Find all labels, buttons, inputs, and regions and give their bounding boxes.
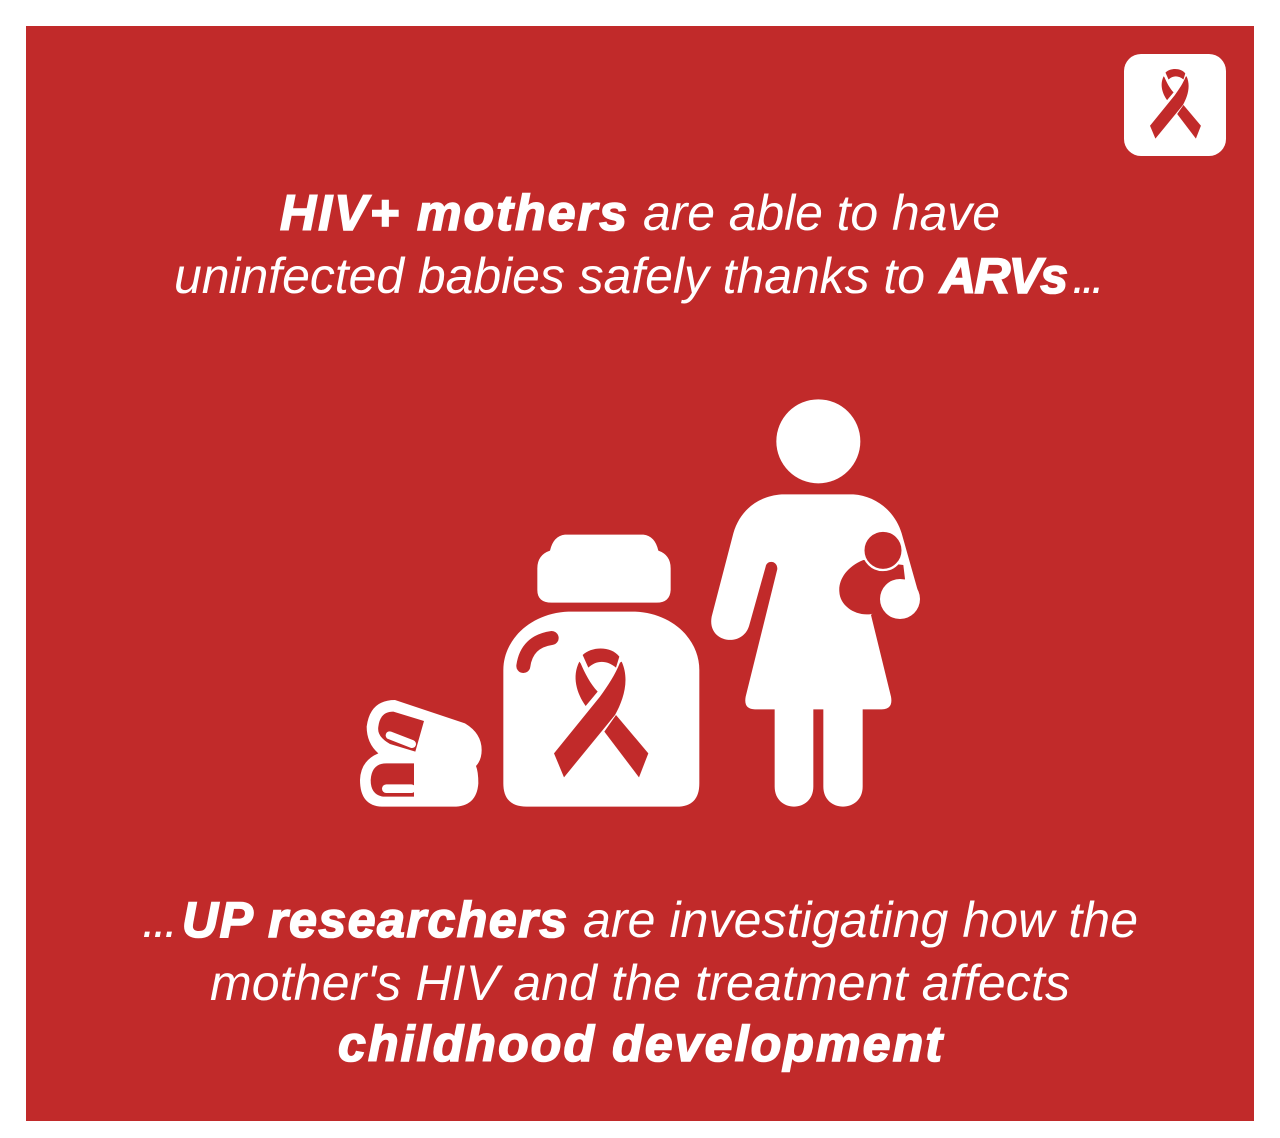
icon: mother holding baby — [711, 399, 920, 807]
baby body — [839, 560, 905, 614]
heading: top statement: uninfected babies safely thanks to — [174, 248, 925, 304]
heading: top statement: ARVs — [938, 248, 1068, 304]
heading: top statement — [174, 185, 1105, 304]
mother head — [776, 399, 860, 483]
icon: medicine jar with ribbon — [503, 535, 699, 807]
icon: capsules — [360, 700, 482, 807]
text: bottom statement: mother's HIV and the treatment affects — [210, 955, 1070, 1011]
jar lid — [537, 535, 671, 603]
text: bottom statement — [142, 892, 1138, 1072]
text: bottom statement: childhood development — [338, 1016, 944, 1072]
icon: ribbon logo badge — [1124, 54, 1226, 156]
heading: top statement: HIV+ mothers — [280, 185, 627, 241]
mother hand — [880, 579, 920, 619]
text: bottom statement: ... — [142, 892, 178, 948]
mother body — [711, 494, 919, 807]
text: bottom statement: are investigating how the — [583, 892, 1138, 948]
baby head — [863, 531, 903, 570]
jar highlight — [523, 638, 552, 666]
jar body — [503, 612, 699, 807]
jar ribbon — [554, 648, 648, 777]
heading: top statement: are able to have — [643, 185, 1000, 241]
heading: top statement: ... — [1072, 248, 1105, 304]
text: bottom statement: UP researchers — [182, 892, 567, 948]
